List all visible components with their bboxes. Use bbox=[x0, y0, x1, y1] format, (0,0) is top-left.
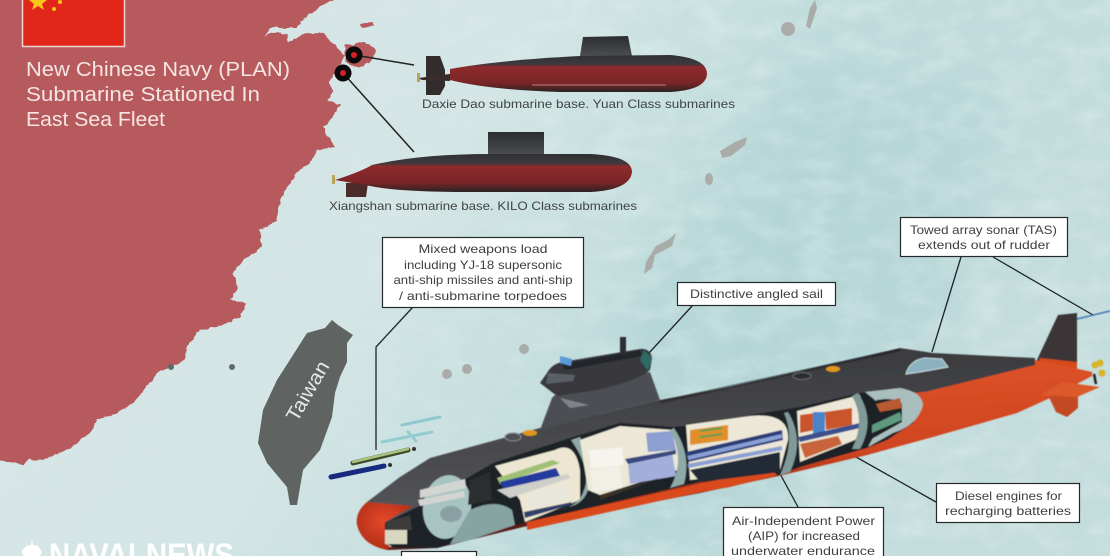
orange nose bbox=[357, 502, 413, 550]
callout: AIP: (AIP) for increased bbox=[748, 529, 860, 543]
title: East Sea Fleet bbox=[26, 109, 165, 131]
callout: diesel engines: recharging batteries bbox=[945, 504, 1071, 518]
rudder upper bbox=[1036, 313, 1077, 380]
sail mast bbox=[620, 337, 626, 355]
frame ring 3 bbox=[670, 428, 686, 488]
Yuan class submarine bbox=[417, 36, 707, 95]
weapons compartment bbox=[495, 448, 580, 522]
engine compartment bbox=[797, 395, 863, 462]
flag of China bbox=[22, 0, 124, 46]
horizontal fin bbox=[1040, 382, 1100, 397]
AIP compartment bbox=[686, 416, 788, 482]
hull orange aft bbox=[523, 360, 1092, 527]
callout: towed array: Towed array sonar (TAS) bbox=[910, 223, 1057, 237]
sail lower bbox=[540, 372, 660, 430]
frame ring 5 bbox=[852, 393, 868, 449]
lower hull bow bbox=[387, 518, 530, 550]
title bbox=[26, 59, 290, 131]
callout: weapons: including YJ-18 supersonic bbox=[404, 258, 562, 272]
equipment compartment bbox=[580, 426, 678, 500]
caption: Kilo class: Xiangshan submarine base. KILO Class submarines bbox=[329, 199, 637, 213]
lower fin bbox=[1048, 395, 1078, 417]
map: small islands bbox=[168, 0, 817, 379]
logo ship icon bbox=[21, 540, 42, 556]
label: Taiwan: Taiwan bbox=[282, 357, 334, 426]
aft dome bbox=[865, 388, 923, 447]
callout: angled sail bbox=[678, 282, 836, 306]
Kilo class submarine bbox=[332, 132, 632, 197]
callout: weapons: anti-ship missiles and anti-ship bbox=[394, 273, 573, 287]
callout: towed array bbox=[900, 218, 1068, 256]
sail display bbox=[560, 356, 572, 366]
frame ring 2 bbox=[560, 437, 590, 510]
callout: weapons: / anti-submarine torpedoes bbox=[399, 289, 567, 303]
cutaway interior base bbox=[385, 388, 922, 548]
callout: diesel engines bbox=[936, 484, 1080, 522]
orange strip bbox=[527, 470, 777, 530]
callout: bottom clipped box bbox=[402, 552, 476, 556]
sea background bbox=[290, 0, 1110, 556]
hull dark upper bbox=[367, 348, 1035, 526]
aft window bbox=[906, 358, 948, 374]
sail upper bbox=[540, 349, 652, 396]
caption: Yuan class: Daxie Dao submarine base. Yuan Class submarines bbox=[422, 97, 735, 111]
tow line bbox=[1077, 311, 1110, 319]
callout: AIP: Air-Independent Power bbox=[732, 514, 875, 528]
callout: AIP bbox=[724, 508, 884, 556]
title: New Chinese Navy (PLAN) bbox=[26, 59, 290, 81]
bow compartment bbox=[385, 472, 515, 544]
callout: weapons: Mixed weapons load bbox=[418, 242, 548, 256]
main submarine cutaway bbox=[357, 311, 1110, 550]
aft compartment bbox=[870, 398, 902, 440]
map: mainland China bbox=[0, 0, 345, 465]
callout: angled sail: Distinctive angled sail bbox=[690, 287, 823, 301]
callout: towed array: extends out of rudder bbox=[918, 238, 1050, 252]
frame ring 4 bbox=[780, 412, 797, 475]
hull hatches bbox=[523, 430, 537, 436]
weapons: missiles and torpedoes bbox=[331, 417, 440, 477]
title: Submarine Stationed In bbox=[26, 84, 260, 106]
callout: weapons bbox=[382, 238, 584, 308]
map: offshore islands near bases bbox=[345, 22, 377, 68]
callout: diesel engines: Diesel engines for bbox=[955, 489, 1062, 503]
map: Taiwan bbox=[258, 320, 353, 505]
leader lines for callouts bbox=[376, 257, 1093, 507]
propeller bbox=[1092, 360, 1106, 376]
base markers and leader lines bbox=[334, 46, 414, 152]
flag stars bbox=[29, 0, 62, 11]
